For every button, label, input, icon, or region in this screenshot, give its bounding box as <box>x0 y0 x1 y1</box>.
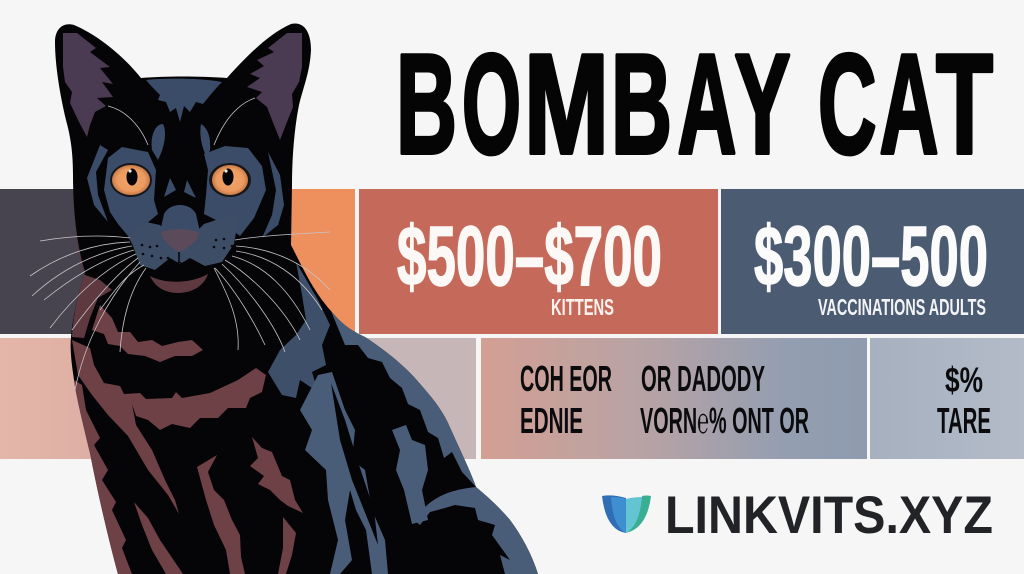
title: Y <box>734 25 790 184</box>
panel: dark band left <box>0 189 120 334</box>
title: T <box>936 25 993 184</box>
title: B <box>611 25 672 184</box>
cat: left cheek arc <box>87 145 108 222</box>
panel: grey band <box>360 338 476 459</box>
title: A <box>678 25 736 184</box>
panel: orange band <box>240 189 355 334</box>
cat: nose bridge <box>160 205 200 232</box>
logo: shield icon <box>602 495 651 533</box>
illustration: black cat <box>30 24 538 574</box>
logo: wordmark: LINKVITS.XYZ <box>665 486 993 545</box>
cat: belly stroke two <box>197 455 245 574</box>
title: B <box>396 25 457 184</box>
text: symbols: $% <box>945 361 983 400</box>
cat: lower left stroke <box>134 502 183 574</box>
panel: rate <box>870 338 1024 459</box>
cat: left body maroon edge <box>74 380 132 574</box>
cat: forehead patch <box>146 79 222 122</box>
cat: flank blue <box>300 372 388 574</box>
cat: chin <box>150 274 208 293</box>
cat: right whiskers <box>214 98 330 352</box>
cat: lower neck band <box>72 340 266 514</box>
cat: left eye patch <box>104 147 158 236</box>
price: kittens: $500–$700 <box>397 209 662 303</box>
panel: adults price <box>721 189 1024 334</box>
cat: left whiskers <box>30 106 148 390</box>
cat: belly stroke three <box>278 517 296 574</box>
cat: right ear inner <box>247 33 302 140</box>
cat: right eye <box>209 163 251 197</box>
cat: neck blue right <box>268 262 330 398</box>
cat: back blue patch <box>392 425 428 524</box>
title: O <box>462 25 521 184</box>
text: detail line one right: OR DADODY <box>641 358 765 399</box>
cat: mouth <box>168 252 192 272</box>
cat: left ear inner <box>63 33 113 137</box>
cat: flank dark streak <box>331 383 378 545</box>
cat: belly stroke one <box>250 437 303 513</box>
title: C <box>818 25 876 184</box>
panel: care details <box>481 338 867 459</box>
cat: brow marks <box>152 124 210 160</box>
label: kittens: KITTENS <box>551 294 614 320</box>
text: detail line two left: EDNIE <box>520 400 583 441</box>
panel: kittens price <box>359 189 718 334</box>
cat: right cheek arc <box>262 152 284 238</box>
cat: right eye patch <box>204 146 266 236</box>
cat: muzzle spots <box>141 238 233 259</box>
cat: upper neck band <box>92 305 203 362</box>
title: A <box>880 25 938 184</box>
text: detail line two right: VORN℮% ONT OR <box>640 400 809 441</box>
title: M <box>524 25 609 184</box>
cat: back outer blue <box>331 311 476 487</box>
panel: pink band left <box>0 338 120 459</box>
cat: haunch blue <box>414 487 538 574</box>
cat: left eye <box>110 163 152 197</box>
cat: upper nose triangles <box>164 178 196 198</box>
cat: muzzle <box>128 214 240 270</box>
cat: nose <box>161 229 199 252</box>
cat: left neck maroon edge <box>72 205 112 338</box>
cat: silhouette <box>55 24 538 574</box>
text: detail line one left: COH EOR <box>520 358 612 399</box>
